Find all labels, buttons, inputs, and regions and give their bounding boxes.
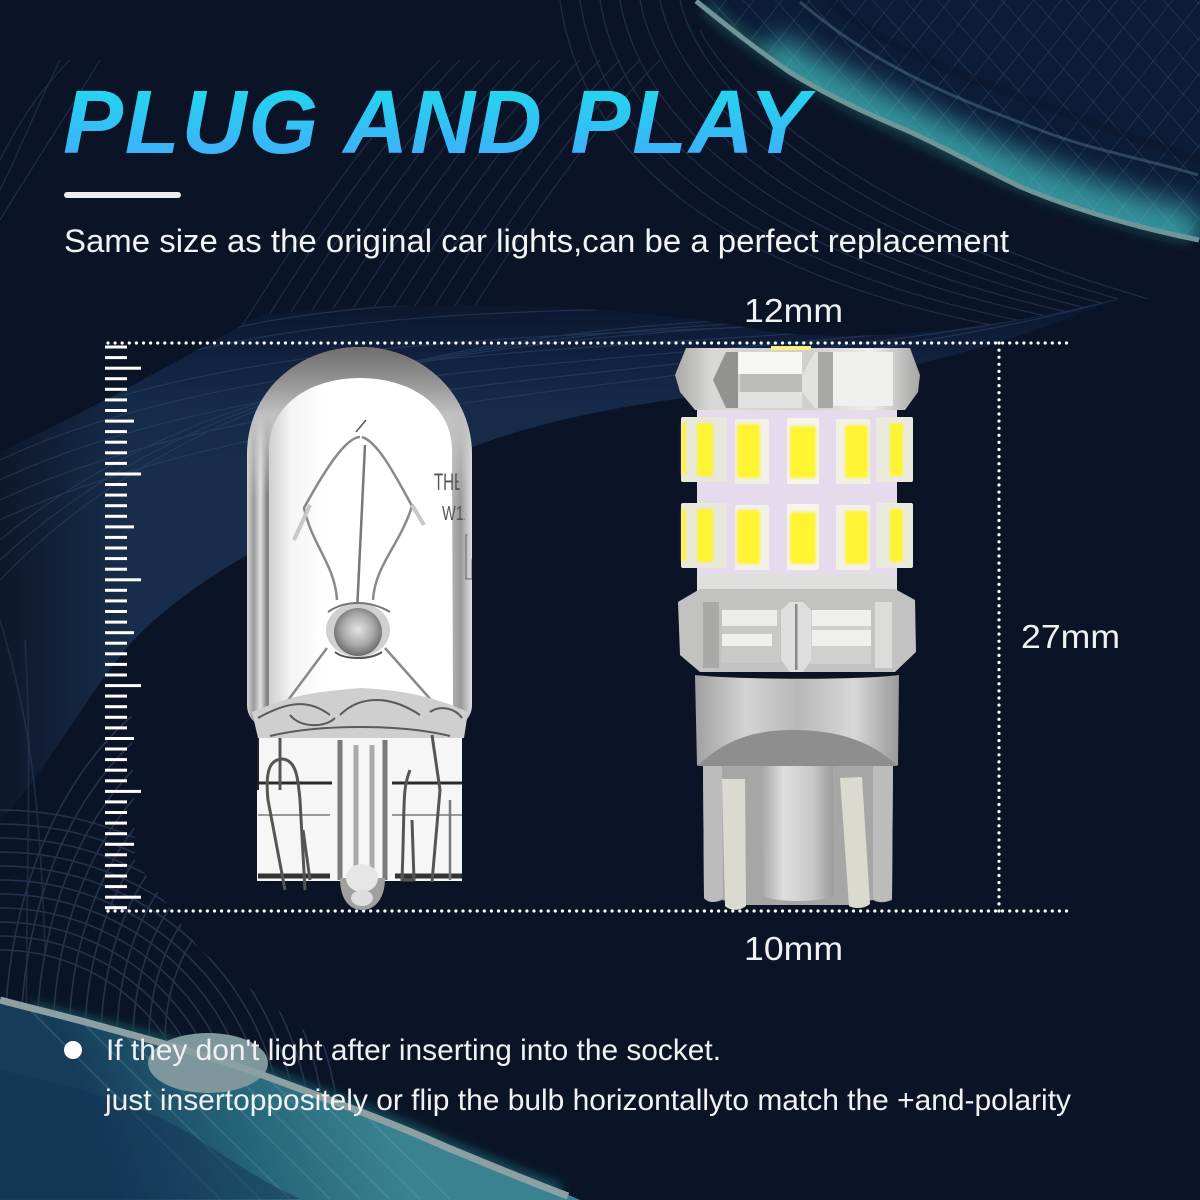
background: teal swoosh top right [696, 0, 1200, 242]
LED chips row 1 [681, 417, 913, 484]
filament [283, 420, 432, 707]
terminal right [840, 777, 870, 908]
stem [703, 766, 893, 905]
label: 10mm: 10mm [744, 930, 843, 967]
subtitle: Same size as the original car lights,can be a perfect replacement [64, 223, 1009, 259]
etched marking: W12 [442, 503, 472, 525]
background: lighter navy band [0, 298, 1120, 820]
terminal left [722, 779, 746, 910]
wedge base [257, 738, 462, 881]
LED body [697, 405, 897, 595]
glass envelope [247, 347, 472, 730]
halogen glass bulb [247, 347, 474, 910]
base shadow arc [697, 730, 898, 766]
collar [678, 589, 916, 672]
etched marking: THEA [434, 469, 474, 496]
background: band left fade [0, 315, 260, 820]
label: 27mm: 27mm [1021, 618, 1120, 655]
glass pinch seal [252, 688, 468, 738]
LED bulb [675, 346, 920, 910]
background: fine arcs top centre [0, 0, 1170, 345]
title underline [64, 192, 181, 198]
background: left nested arcs [0, 620, 340, 1190]
base details [258, 735, 462, 890]
dimension guide lines [108, 343, 1072, 911]
etched marking [434, 469, 474, 579]
background: dark mask in the centre [130, 298, 1200, 1200]
title: PLUG AND PLAY [63, 73, 816, 173]
glass interior [269, 378, 453, 709]
note line 2: just insertoppositely or flip the bulb horizontallyto match the +and-polarity [104, 1084, 1071, 1117]
note bullet [64, 1041, 82, 1059]
base tip [340, 864, 385, 910]
ruler [105, 346, 141, 909]
base sleeve [695, 675, 899, 765]
heat sink head [675, 346, 920, 410]
note line 1: If they don't light after inserting into the socket. [106, 1034, 721, 1067]
background: teal swoosh bottom left [0, 1000, 580, 1200]
filament bead [326, 603, 390, 658]
LED chips row 2 [681, 503, 913, 570]
background: fan lines across the band [0, 298, 1120, 580]
label: 12mm: 12mm [744, 292, 843, 329]
